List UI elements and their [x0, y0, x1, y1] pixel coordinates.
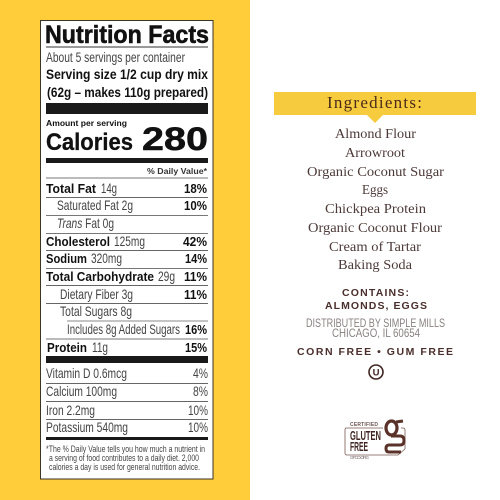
- calories: [46, 118, 208, 157]
- vitamins and minerals rows: 10%: [188, 419, 208, 435]
- icon: certified gluten free logo: GLUTEN: [350, 429, 381, 443]
- allergen statement: [325, 287, 427, 312]
- calories: Amount per serving: [46, 118, 127, 128]
- nutrient rows: 14%: [185, 251, 207, 266]
- footnote: a serving of food contributes to a daily diet. 2,000: [49, 453, 199, 464]
- vitamins and minerals rows: 10%: [188, 402, 208, 418]
- nutrient rows: Includes 8g Added Sugars: [67, 322, 180, 337]
- ingredients list: Cream of Tartar: [329, 239, 422, 254]
- vitamins and minerals rows: 4%: [193, 365, 208, 381]
- icon: certified gluten free logo: GFCO.ORG: [350, 455, 369, 460]
- nutrient rows: 29g: [158, 268, 175, 284]
- nutrient rows: Cholesterol: [46, 234, 110, 249]
- nutrient rows: Total Fat: [46, 181, 97, 196]
- servings text: [46, 50, 208, 100]
- calories: 280: [142, 121, 208, 157]
- nutrient rows: 11%: [184, 269, 207, 284]
- ingredients list: Organic Coconut Flour: [308, 220, 443, 235]
- vitamins and minerals rows: Vitamin D 0.6mcg: [46, 365, 127, 381]
- ingredients list: Baking Soda: [338, 257, 412, 272]
- nutrient rows: Dietary Fiber 3g: [60, 286, 133, 302]
- distributor text: [306, 316, 445, 340]
- footnote: *The % Daily Value tells you how much a nutrient in: [46, 444, 205, 455]
- vitamins and minerals rows: 8%: [193, 383, 208, 399]
- vitamins and minerals rows: Iron 2.2mg: [46, 402, 95, 418]
- icon: certified gluten free logo: FREE: [350, 440, 368, 454]
- nutrient rows: 11%: [184, 287, 207, 302]
- servings text: About 5 servings per container: [46, 50, 185, 65]
- calories: Calories: [46, 129, 133, 156]
- nutrient rows: 10%: [184, 198, 207, 213]
- ingredients list: Almond Flour: [335, 126, 417, 141]
- ingredients list: Organic Coconut Sugar: [307, 164, 445, 179]
- nutrient rows: 15%: [185, 340, 207, 355]
- ingredients list: Arrowroot: [345, 145, 405, 160]
- nutrient rows: Sodium: [46, 251, 87, 266]
- nutrient rows: 125mg: [114, 233, 145, 249]
- panel: nutrition facts: [40, 20, 213, 479]
- servings text: Serving size 1/2 cup dry mix: [46, 66, 208, 82]
- ingredients banner: [274, 92, 476, 123]
- distributor text: DISTRIBUTED BY SIMPLE MILLS: [306, 316, 445, 330]
- footnote: [46, 444, 205, 473]
- icon: kosher U: [369, 365, 383, 379]
- vitamins and minerals rows: Potassium 540mg: [46, 419, 128, 435]
- ingredients list: Eggs: [362, 182, 388, 197]
- distributor text: CHICAGO, IL 60654: [332, 326, 420, 340]
- yellow background panel: [0, 0, 250, 500]
- nutrient rows: 11g: [92, 339, 108, 355]
- nutrient rows: [46, 180, 208, 355]
- title: Nutrition Facts: [45, 21, 209, 49]
- nutrient rows: Total Sugars 8g: [60, 303, 132, 319]
- icon: certified gluten free logo: [345, 421, 405, 460]
- nutrient rows: Total Carbohydrate: [46, 269, 154, 284]
- footnote: calories a day is used for general nutrition advice.: [49, 462, 200, 473]
- nutrient rows: 16%: [185, 322, 207, 337]
- nutrient rows: 14g: [101, 180, 117, 196]
- nutrient rows: Protein: [47, 340, 87, 355]
- ingredients list: Chickpea Protein: [325, 201, 426, 216]
- servings text: (62g – makes 110g prepared): [47, 84, 208, 100]
- ingredients list: [307, 126, 445, 272]
- vitamins and minerals rows: Calcium 100mg: [46, 383, 117, 399]
- icon: certified gluten free logo: CERTIFIED: [350, 422, 378, 428]
- nutrient rows: Saturated Fat 2g: [57, 197, 133, 213]
- allergen statement: ALMONDS, EGGS: [325, 300, 427, 312]
- corn free gum free: CORN FREE • GUM FREE: [297, 346, 453, 358]
- nutrient rows: 42%: [183, 234, 207, 249]
- allergen statement: CONTAINS:: [342, 287, 409, 299]
- nutrient rows: Trans Fat 0g: [57, 215, 114, 231]
- nutrient rows: 320mg: [91, 250, 122, 266]
- nutrient rows: 18%: [184, 181, 207, 196]
- vitamins and minerals rows: [46, 365, 208, 435]
- ingredients banner: Ingredients:: [327, 93, 422, 112]
- icon: kosher U: U: [373, 368, 380, 378]
- daily value header: % Daily Value*: [147, 166, 208, 176]
